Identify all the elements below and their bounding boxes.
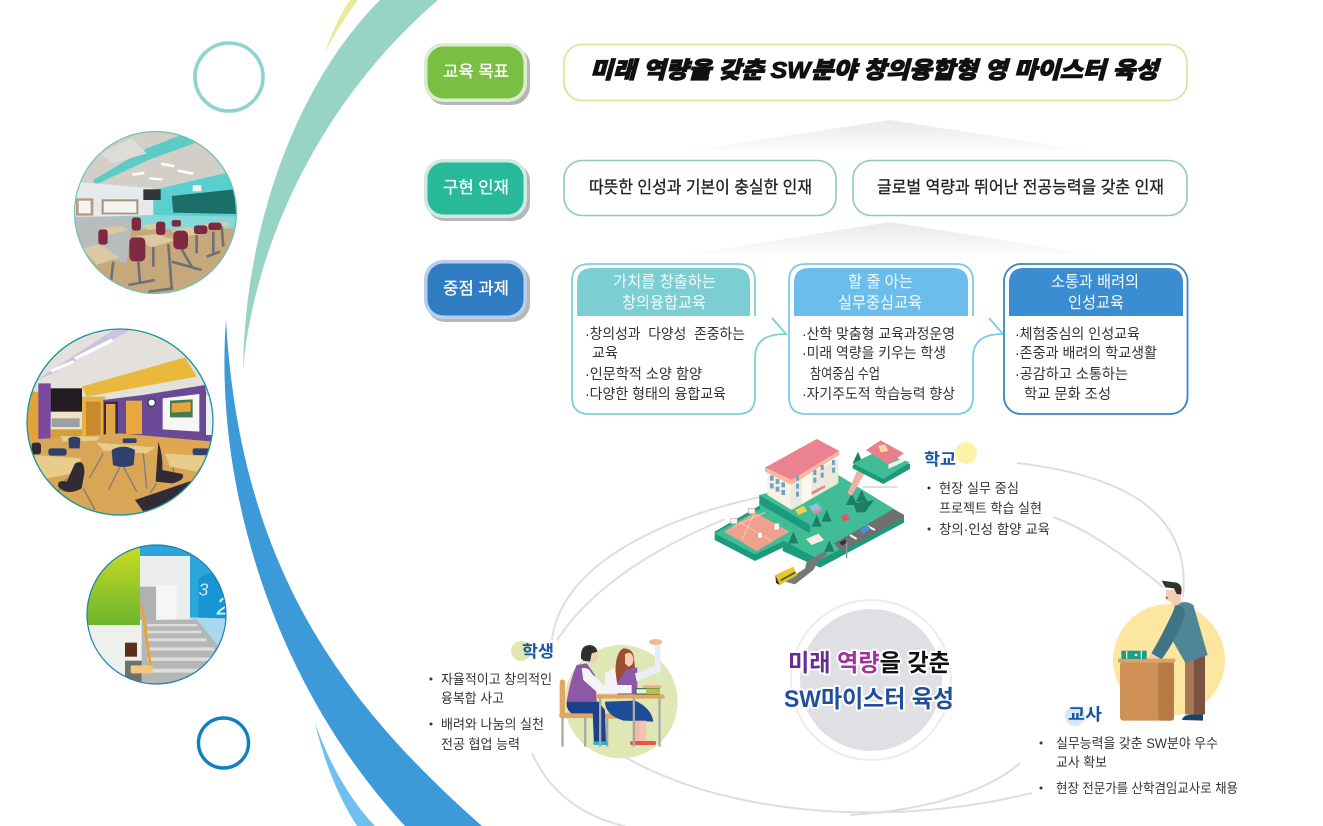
student bullet list: 배려와 나눔의 실천 [441, 717, 544, 732]
task card: practice-centered education: ·자기주도적 학습능력 향상 [802, 386, 955, 403]
photo 1 outline [74, 132, 236, 294]
centre emblem: future competence SW meister [784, 600, 954, 760]
task card: character education: ·공감하고 소통하는 [1015, 366, 1128, 383]
task card: practice-centered education: 참여중심 수업 [810, 366, 880, 383]
teacher bullet list: 실무능력을 갖춘 SW분야 우수 [1056, 736, 1218, 751]
decorative swoosh: teal [243, 0, 438, 370]
book [1121, 651, 1147, 659]
centre emblem: future competence SW meister: 미래 역량을 갖춘 [788, 650, 950, 677]
task card: creative convergence education: ·창의성과 다양성 존중하는 [585, 326, 745, 343]
goal statement box [564, 44, 1187, 100]
rising gradient arrow between talent and tasks [640, 222, 1140, 262]
task card: creative convergence education: 창의융합교육 [622, 294, 706, 312]
bus [775, 567, 797, 585]
heading: school: 학교 [924, 450, 956, 469]
photo 3 outline [87, 545, 226, 684]
label badge: key tasks: 중점 과제 [443, 279, 509, 298]
ring: teal [195, 43, 263, 111]
teacher bullet list: 교사 확보 [1056, 755, 1107, 770]
talent box: warm character: 따뜻한 인성과 기본이 충실한 인재 [589, 178, 812, 197]
student bullet list [430, 672, 552, 752]
label badge: target talent: 구현 인재 [443, 178, 509, 197]
island base sides [715, 478, 904, 568]
task card: creative convergence education [572, 264, 786, 414]
ring: blue [198, 718, 248, 768]
school bullet list: 프로젝트 학습 실현 [939, 501, 1042, 516]
desk and books [596, 685, 665, 747]
label badge: key tasks [424, 260, 530, 322]
talent box: global competence [853, 160, 1187, 216]
school bullet list: 현장 실무 중심 [939, 481, 1019, 496]
task card: creative convergence education: 교육 [592, 346, 618, 362]
illustration: teacher at a lectern [1113, 581, 1225, 721]
torso and arm [1148, 602, 1208, 663]
raised terrace edge [759, 495, 810, 533]
task card: practice-centered education: ·산학 맞춤형 교육과정운영 [802, 326, 955, 343]
goal statement box: 미래 역량을 갖춘 SW분야 창의융합형 영 마이스터 육성 [590, 57, 1161, 83]
book hill [853, 440, 910, 484]
photo: classroom with teal wall [73, 130, 240, 297]
label badge: education goal [424, 43, 530, 105]
task card: practice-centered education: 할 줄 아는 [848, 273, 913, 291]
task card: practice-centered education: 실무중심교육 [838, 294, 922, 312]
lectern [1118, 659, 1175, 721]
task card: character education: ·존중과 배려의 학교생활 [1015, 345, 1157, 362]
school building [765, 439, 839, 510]
legs [1182, 655, 1205, 721]
basketball hoops [731, 508, 779, 538]
school bullet list: 창의·인성 함양 교육 [939, 522, 1050, 537]
orbit lines connecting school, students and teachers [532, 463, 1184, 826]
photo: staircase: 2 [216, 593, 230, 620]
label badge: target talent [424, 159, 530, 221]
label badge: education goal: 교육 목표 [443, 62, 509, 81]
task card: practice-centered education: ·미래 역량을 키우는 학생 [802, 345, 946, 362]
photo 2 outline [27, 329, 213, 515]
task card: character education: 학교 문화 조성 [1024, 386, 1111, 403]
task card: creative convergence education: ·인문학적 소양 함양 [585, 366, 702, 383]
boy [567, 645, 632, 745]
teacher bullet list: 현장 전문가를 산학겸임교사로 채용 [1056, 781, 1238, 796]
school bullet list [928, 481, 1050, 537]
talent box: global competence: 글로벌 역량과 뛰어난 전공능력을 갖춘 인재 [877, 178, 1164, 197]
teacher bullet list [1040, 736, 1238, 796]
illustration: school campus [715, 439, 910, 585]
heading: school [924, 442, 977, 469]
island top [715, 475, 904, 560]
photo: staircase [85, 543, 230, 687]
trees and details [788, 452, 876, 552]
task card: creative convergence education: 가치를 창출하는 [613, 273, 716, 291]
illustration: students at a desk [559, 639, 678, 758]
girl's chair [605, 713, 630, 747]
photo: staircase: 3 [199, 580, 209, 600]
heading: students [511, 641, 554, 661]
talent box: warm character [564, 160, 836, 216]
task card: character education: 소통과 배려의 [1051, 273, 1139, 291]
road [834, 509, 904, 552]
centre emblem: future competence SW meister: SW마이스터 육성 [784, 686, 954, 713]
task card: practice-centered education [789, 264, 1003, 414]
decorative swoosh: light blue [315, 723, 375, 826]
heading: teachers: 교사 [1068, 705, 1102, 724]
tennis court [724, 512, 789, 551]
photo: classroom with purple and yellow walls [23, 327, 217, 520]
task card: creative convergence education: ·다양한 형태의 융합교육 [585, 386, 726, 403]
heading: students: 학생 [522, 642, 554, 661]
boy's chair [559, 679, 593, 747]
rising gradient arrow between goal and talent [640, 120, 1135, 158]
task card: character education: 인성교육 [1068, 294, 1124, 312]
small buildings and cars [795, 470, 871, 558]
student bullet list: 융복합 사고 [441, 691, 504, 706]
head [1162, 581, 1182, 605]
task card: character education [1004, 264, 1188, 414]
student bullet list: 자율적이고 창의적인 [441, 672, 552, 687]
girl [605, 639, 662, 745]
decorative swoosh: blue [224, 320, 482, 826]
student bullet list: 전공 협업 능력 [441, 737, 520, 752]
decorative swoosh: yellow [325, 0, 358, 53]
task card: character education: ·체험중심의 인성교육 [1015, 326, 1140, 343]
